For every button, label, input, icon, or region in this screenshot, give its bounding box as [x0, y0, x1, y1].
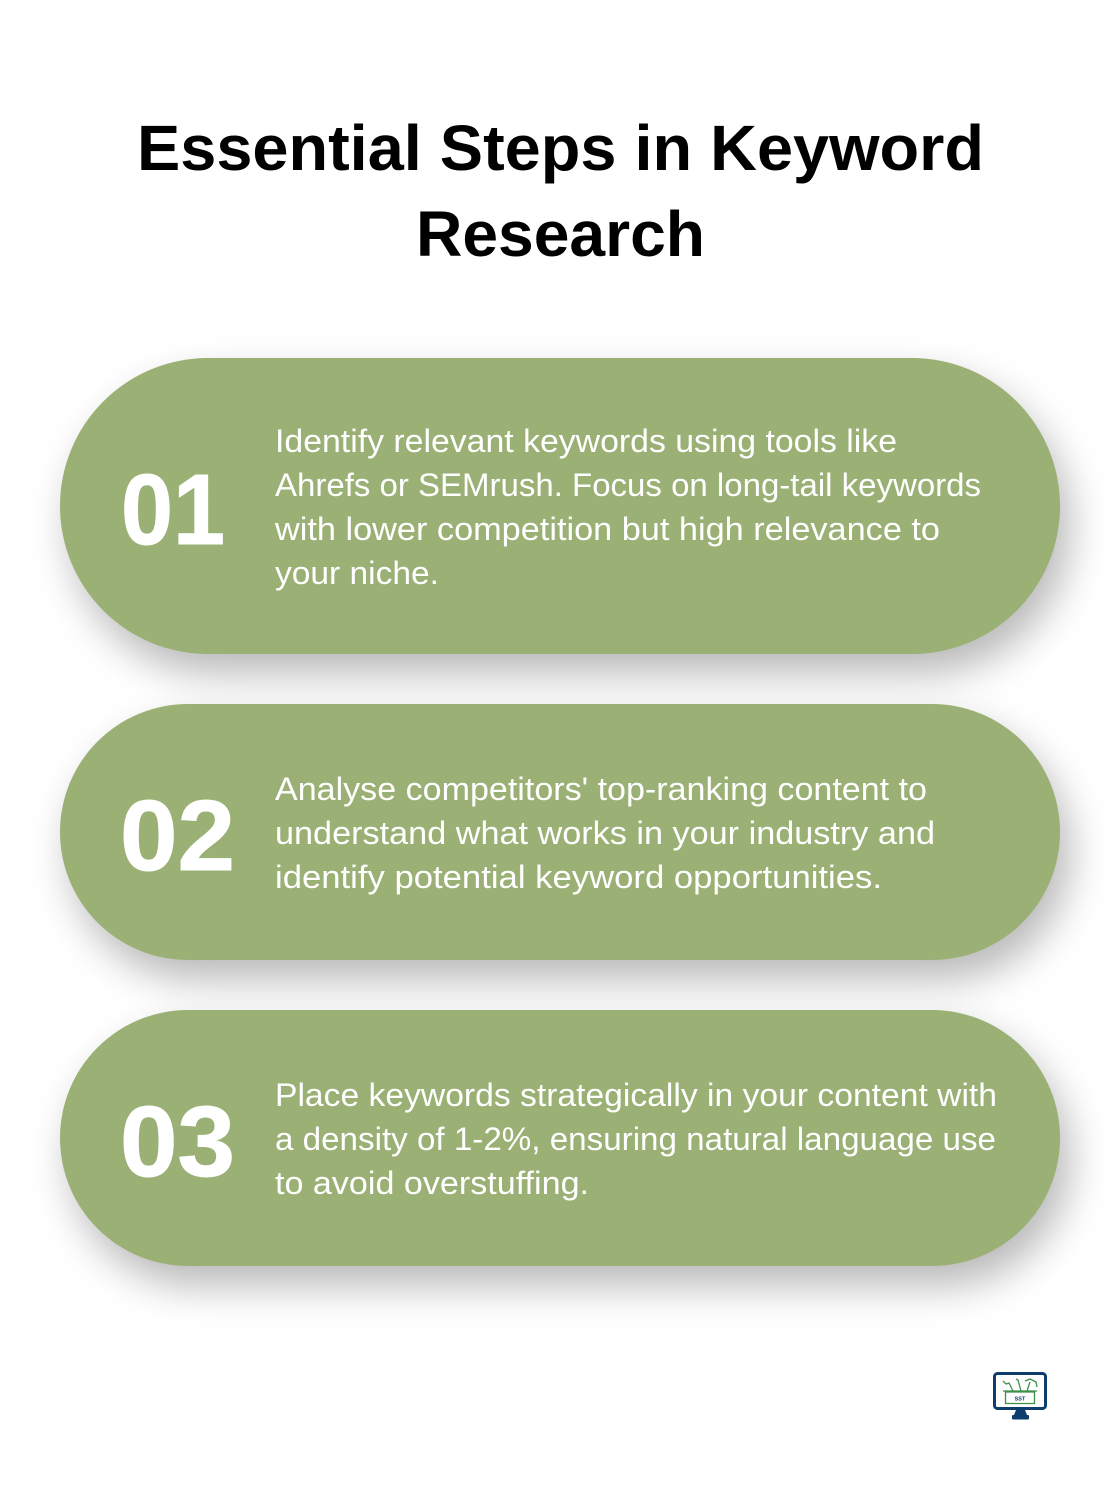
- step 2 number: 02: [120, 780, 235, 892]
- step 1 text: your niche.: [275, 555, 439, 591]
- step 3 text: to avoid overstuffing.: [275, 1165, 589, 1201]
- panel: step 3 card: [60, 1010, 1060, 1266]
- step 1 text: Identify relevant keywords using tools like: [275, 423, 897, 459]
- step 3 text: a density of 1-2%, ensuring natural language use: [275, 1121, 996, 1157]
- title: Essential Steps in Keyword: [137, 112, 984, 184]
- step 2 text: [275, 771, 935, 895]
- icon: monitor with toolbox logo: SST: [1015, 1396, 1026, 1402]
- panel: step 2 card: [60, 704, 1060, 960]
- title: Research: [416, 198, 705, 270]
- title: [137, 112, 984, 270]
- step 1 number: 01: [121, 454, 225, 566]
- icon: monitor with toolbox logo: [994, 1374, 1046, 1420]
- step 3 text: [275, 1077, 997, 1201]
- step 2 text: Analyse competitors' top-ranking content to: [275, 771, 927, 807]
- panel: step 1 card: [60, 358, 1060, 654]
- step 1 text: Ahrefs or SEMrush. Focus on long-tail keywords: [275, 467, 981, 503]
- step 3 text: Place keywords strategically in your content with: [275, 1077, 997, 1113]
- step 1 text: [274, 423, 981, 591]
- step 2 text: understand what works in your industry and: [275, 815, 935, 851]
- step 2 text: identify potential keyword opportunities.: [275, 859, 882, 895]
- step 3 number: 03: [120, 1086, 235, 1198]
- step 1 text: with lower competition but high relevance to: [274, 511, 940, 547]
